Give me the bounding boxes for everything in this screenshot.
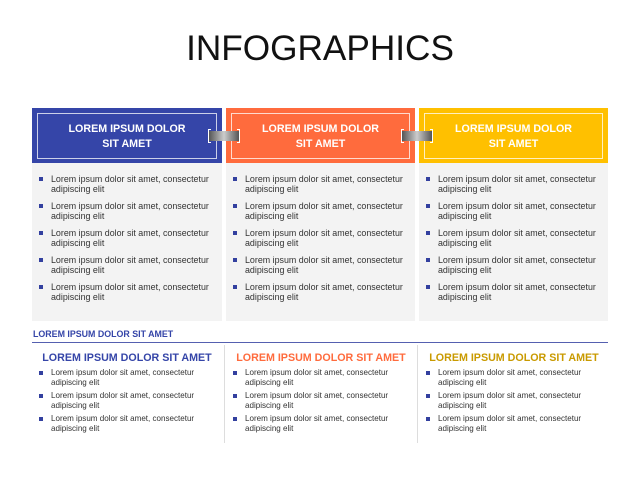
panel: yellow column list: Lorem ipsum dolor sit amet, consectetur [438,201,596,211]
connector: blue to orange [208,129,240,143]
panel: blue column list: Lorem ipsum dolor sit amet, consectetur [51,282,209,292]
panel: yellow column list: Lorem ipsum dolor sit amet, consectetur [438,255,596,265]
subheading: blue: LOREM IPSUM DOLOR SIT AMET [42,352,212,364]
panel: orange column list: Lorem ipsum dolor sit amet, consectetur [245,174,403,184]
header: yellow: SIT AMET [489,138,538,150]
panel: yellow column list: Lorem ipsum dolor sit amet, consectetur [438,228,596,238]
lower list: blue: adipiscing elit [51,378,99,387]
lower list: orange: Lorem ipsum dolor sit amet, consectetur [245,391,388,400]
lower list: blue [39,368,194,433]
lower list: orange: adipiscing elit [245,378,293,387]
panel: blue column list: adipiscing elit [51,292,104,302]
lower list: blue: Lorem ipsum dolor sit amet, consectetur [51,414,194,423]
panel: yellow column list: adipiscing elit [438,238,491,248]
lower list: orange: Lorem ipsum dolor sit amet, consectetur [245,368,388,377]
panel: blue column list: adipiscing elit [51,211,104,221]
panel: orange column list: adipiscing elit [245,211,298,221]
subheading: orange: LOREM IPSUM DOLOR SIT AMET [236,352,406,364]
lower list: yellow: Lorem ipsum dolor sit amet, consectetur [438,391,581,400]
panel: yellow column list: adipiscing elit [438,265,491,275]
panel: blue column list [32,163,222,321]
panel: blue column list: adipiscing elit [51,265,104,275]
header: yellow [419,108,608,163]
lower list: orange [233,368,388,433]
panel: orange column list: adipiscing elit [245,184,298,194]
panel: orange column list [226,163,415,321]
lower list: yellow: adipiscing elit [438,424,486,433]
panel: blue column list: Lorem ipsum dolor sit amet, consectetur [51,174,209,184]
header: orange: SIT AMET [296,138,345,150]
subheading: yellow: LOREM IPSUM DOLOR SIT AMET [429,352,599,364]
panel: yellow column list: adipiscing elit [438,211,491,221]
lower list: yellow [426,368,581,433]
panel: orange column list: adipiscing elit [245,238,298,248]
panel: blue column list: Lorem ipsum dolor sit amet, consectetur [51,228,209,238]
header: blue: LOREM IPSUM DOLOR [69,123,185,135]
panel: orange column list: Lorem ipsum dolor sit amet, consectetur [245,255,403,265]
panel: blue column list: adipiscing elit [51,184,104,194]
panel: yellow column list: adipiscing elit [438,292,491,302]
lower list: yellow: adipiscing elit [438,401,486,410]
lower list: yellow: adipiscing elit [438,378,486,387]
lower list: blue: adipiscing elit [51,424,99,433]
panel: orange column list: Lorem ipsum dolor sit amet, consectetur [245,228,403,238]
panel: orange column list: adipiscing elit [245,292,298,302]
panel: orange column list: adipiscing elit [245,265,298,275]
connector: orange to yellow [401,129,433,143]
panel: yellow column list: Lorem ipsum dolor sit amet, consectetur [438,174,596,184]
lower list: blue: Lorem ipsum dolor sit amet, consectetur [51,368,194,377]
lower list: blue: Lorem ipsum dolor sit amet, consectetur [51,391,194,400]
header: orange: LOREM IPSUM DOLOR [262,123,379,135]
header: yellow: LOREM IPSUM DOLOR [455,123,572,135]
header: blue [32,108,222,163]
header: blue: SIT AMET [102,138,152,150]
title: INFOGRAPHICS [186,29,454,68]
panel: orange column list: Lorem ipsum dolor sit amet, consectetur [245,201,403,211]
lower list: yellow: Lorem ipsum dolor sit amet, consectetur [438,414,581,423]
panel: blue column list: Lorem ipsum dolor sit amet, consectetur [51,201,209,211]
panel: yellow column list [419,163,608,321]
lower list: orange: adipiscing elit [245,401,293,410]
lower list: blue: adipiscing elit [51,401,99,410]
header: orange [226,108,415,163]
panel: yellow column list: Lorem ipsum dolor sit amet, consectetur [438,282,596,292]
panel: blue column list: adipiscing elit [51,238,104,248]
panel: blue column list: Lorem ipsum dolor sit amet, consectetur [51,255,209,265]
lower list: orange: Lorem ipsum dolor sit amet, consectetur [245,414,388,423]
lower list: orange: adipiscing elit [245,424,293,433]
section label: LOREM IPSUM DOLOR SIT AMET [33,329,173,339]
panel: orange column list: Lorem ipsum dolor sit amet, consectetur [245,282,403,292]
panel: yellow column list: adipiscing elit [438,184,491,194]
lower list: yellow: Lorem ipsum dolor sit amet, consectetur [438,368,581,377]
